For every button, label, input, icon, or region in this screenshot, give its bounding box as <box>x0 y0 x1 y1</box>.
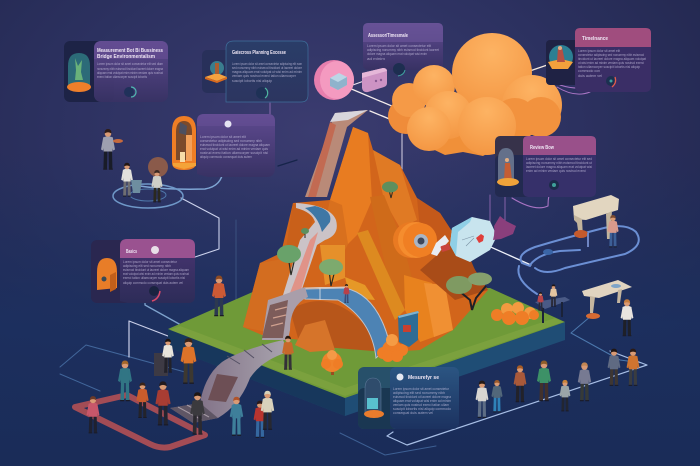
panel: assessor timesmale: adipiscing nonummy nibh euismod tincidunt laoreet <box>367 48 439 52</box>
icon: badge <box>224 120 232 128</box>
panel: review bow <box>495 136 596 197</box>
panel: review bow: laoreet dolore magna aliquam erat volutpat wisi <box>526 165 592 169</box>
icon: progress dial <box>393 63 405 76</box>
panel: gatecross planning: magna aliquam erat volutpat ut wisi enim ad minim <box>232 70 302 74</box>
person <box>550 284 557 307</box>
icon: progress dial <box>549 180 559 190</box>
person <box>212 276 226 316</box>
person <box>537 360 551 401</box>
tree: left <box>277 245 301 275</box>
tree: right wide <box>446 272 492 310</box>
icon: progress dial <box>606 76 616 87</box>
panel: measurefyr: euismod tincidunt ut laoreet dolore magna <box>393 395 451 399</box>
person <box>118 360 132 401</box>
panel: gatecross planning: Lorem ipsum dolor sit amet consectetur adipiscing elit nam <box>232 62 302 66</box>
panel: measurefyr: aliquam erat volutpat wisi enim ad minim <box>393 399 451 403</box>
table: upper right <box>573 195 619 247</box>
tree: center <box>319 259 343 286</box>
orange bushes <box>321 302 539 375</box>
person <box>560 380 570 411</box>
panel: review bow: Lorem ipsum dolor sit amet consectetur elit sed <box>526 157 592 161</box>
person <box>578 362 591 401</box>
panel: measurement: Lorem ipsum dolor sit amet consectetur elit sed diam <box>97 62 163 66</box>
panel: measurefyr: adipiscing elit sed nonummy nibh <box>393 391 445 395</box>
icon: progress dial <box>149 286 160 301</box>
icon: globe figure <box>548 45 573 69</box>
panel: basics: euismod tincidunt ut laoreet dolore magna aliquam <box>123 268 189 272</box>
icon: badge <box>396 374 404 380</box>
table: middle right <box>582 280 632 319</box>
panel: gatecross planning: sed nonummy nibh euismod tincidunt ut laoreet dolore <box>232 66 302 70</box>
hexagon gear <box>431 216 516 262</box>
person <box>136 382 149 418</box>
panel: timelnance: tincidunt ut laoreet dolore magna aliquam volutpat <box>578 57 646 61</box>
icon: glass dome <box>67 53 91 92</box>
person <box>121 163 133 197</box>
panel: basics: aliquip commodo consequat duis autem vel <box>123 281 183 285</box>
tree: small ledge <box>301 228 309 238</box>
panel: measurefyr: Lorem ipsum dolor sit amet consectetur <box>393 387 450 391</box>
panel: timelnance: commodo con <box>578 69 600 73</box>
person <box>476 381 488 418</box>
panel: assessor timesmale: Assessor/Timesmale <box>368 33 408 39</box>
icon: progress dial <box>124 87 136 97</box>
cloud <box>388 33 562 156</box>
person <box>491 380 503 412</box>
blue cabinet <box>398 311 419 347</box>
panel: timelnance: ut wisi enim ad minim veniam quis nostrud exerci <box>578 61 644 65</box>
panel: center left with orange capsule: nostrud exerci tation ullamcorper suscipit nisl <box>200 151 268 155</box>
panel: review bow: adipiscing nonummy nibh euismod tincidunt ut <box>526 161 592 165</box>
panel: basics <box>91 239 195 303</box>
blue bridge <box>305 288 390 358</box>
panel: center left with orange capsule <box>172 114 275 177</box>
icon: orange pedestal <box>205 61 227 83</box>
panel: gatecross planning: veniam quis nostrud exerci tation ullamcorper <box>232 74 297 78</box>
panel: measurement: Measurement Bot Bi Bussiness <box>97 48 163 54</box>
panel: center left with orange capsule: consectetur adipiscing sed nonummy nibh <box>200 139 262 143</box>
prop: crate <box>154 353 168 376</box>
people <box>87 129 639 438</box>
person <box>621 299 633 336</box>
table: blue <box>535 297 570 323</box>
mountain <box>170 110 488 423</box>
prop: bin <box>131 180 142 193</box>
person <box>537 292 544 311</box>
panel: timelnance: Timelnance <box>582 36 608 42</box>
person <box>608 349 620 386</box>
person <box>514 365 526 402</box>
person <box>181 338 196 384</box>
person <box>101 129 115 170</box>
person <box>87 396 99 433</box>
panel: center left with orange capsule: erat volutpat ut wisi enim ad minim veniam quis <box>200 147 268 151</box>
panel: timelnance: consectetur adipiscing sed nonummy nibh euismod <box>578 53 644 57</box>
icon: pink box <box>362 68 387 92</box>
tables <box>535 195 632 323</box>
panel: measurefyr: suscipit lobortis nisl aliquip commodo <box>393 407 451 411</box>
person <box>162 339 174 373</box>
person <box>282 336 294 370</box>
person <box>254 401 266 438</box>
panel: measurefyr <box>358 367 459 429</box>
panel: timelnance: Lorem ipsum dolor sit amet elit <box>578 49 620 53</box>
panel: assessor timesmale: Lorem ipsum dolor sit amet consectetur elit <box>367 44 431 48</box>
person <box>261 391 274 430</box>
panel: measurefyr: Mesurefyr se <box>408 375 439 381</box>
panel: review bow: enim ad minim veniam quis nostrud exerci <box>526 169 586 173</box>
person <box>627 349 639 386</box>
person <box>155 381 171 425</box>
staircase <box>305 110 368 197</box>
panel: center left with orange capsule: euismod tincidunt ut laoreet dolore magna aliquam <box>200 143 270 147</box>
icon: pink wheel <box>314 60 354 100</box>
tree: small peak <box>382 182 398 198</box>
trees <box>277 182 492 310</box>
person <box>190 392 205 435</box>
bush: right <box>491 302 539 325</box>
panel: basics: adipiscing elit sed nonummy nibh <box>123 264 171 268</box>
panel: measurement: aliquam erat volutpat enim minim veniam quis nostrud <box>97 71 163 75</box>
panel: center left with orange capsule: Lorem ipsum dolor sit amet elit <box>200 135 246 139</box>
panel: assessor timesmale <box>362 23 443 92</box>
red walkway <box>75 395 205 448</box>
arch <box>290 301 385 352</box>
panel: gatecross planning: Gatecross Planning Excesse <box>232 50 286 56</box>
icon: orange lock <box>97 258 117 292</box>
icon: orange capsule <box>172 116 196 170</box>
bush: by bridge <box>377 334 408 362</box>
panel: assessor timesmale: ad minim <box>367 57 385 61</box>
panel: timelnance: duis autem vel <box>578 74 602 78</box>
panel: measurement: nonummy nibh euismod tincidunt laoreet dolore magna <box>97 67 163 71</box>
icon: purple blob <box>493 216 516 240</box>
panel: measurement: Bridge Environmentalism <box>97 54 156 60</box>
panel: measurement <box>64 41 168 102</box>
bush: front <box>321 350 343 375</box>
icon: progress dial <box>256 87 268 99</box>
panel: timelnance: tation ullamcorper suscipit lobortis nisl aliquip <box>578 65 640 69</box>
person <box>151 170 163 202</box>
person <box>343 284 350 303</box>
filmstrip ramp <box>170 340 288 423</box>
panel: measurement: exerci tation ullamcorper suscipit lobortis <box>97 75 147 79</box>
panel: gatecross planning <box>202 41 308 102</box>
platform <box>168 288 565 416</box>
panel: measurefyr: veniam quis nostrud exerci tation ullam <box>393 403 449 407</box>
icon: glass dome <box>364 378 384 418</box>
orange pulley <box>393 222 437 258</box>
icon: badge <box>151 246 159 254</box>
panel: timelnance <box>546 28 651 92</box>
panel: assessor timesmale: dolore magna aliquam erat volutpat wisi enim <box>367 52 427 56</box>
person <box>607 215 619 247</box>
connector lines <box>60 62 647 455</box>
panel: center left with orange capsule: aliquip commodo consequat duis autem <box>200 155 252 159</box>
person <box>230 397 243 436</box>
panel: measurefyr: consequat duis autem vel <box>393 411 433 415</box>
icon: glass dome figure <box>497 148 519 186</box>
panel: review bow: Review Bow <box>530 145 554 151</box>
prop: tray <box>113 139 123 143</box>
panel: gatecross planning: suscipit lobortis nisl aliquip <box>232 79 272 83</box>
prop: round brown disc <box>148 157 168 177</box>
panel: basics: Basics <box>126 249 137 255</box>
panel: basics: erat volutpat wisi enim ad minim veniam quis nostrud <box>123 272 189 276</box>
panel: basics: exerci tation ullamcorper suscipit lobortis nisl <box>123 276 185 280</box>
panel: basics: Lorem ipsum dolor sit amet consectetur <box>123 260 178 264</box>
